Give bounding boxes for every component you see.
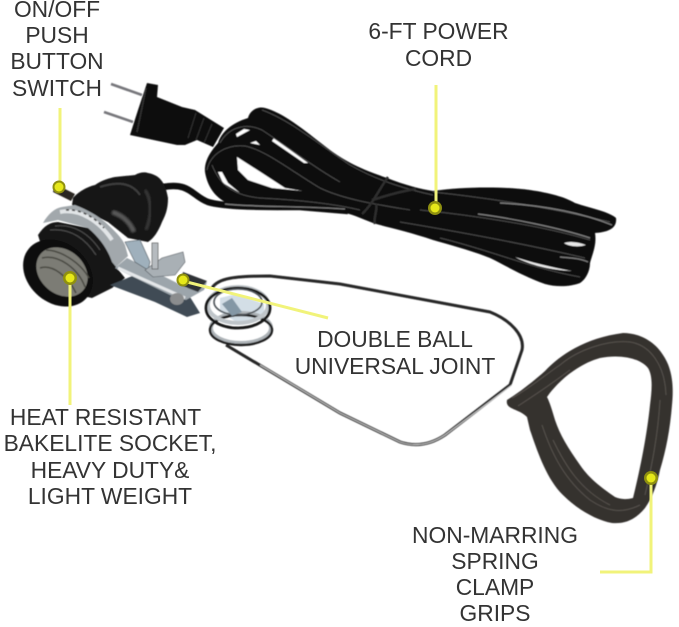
label: power cord: CORD bbox=[405, 45, 472, 71]
push button switch bbox=[53, 184, 75, 201]
power cord bundle bbox=[163, 107, 616, 286]
rubber clamp grip bbox=[507, 333, 673, 523]
cord loop openings bbox=[237, 157, 303, 191]
metal band bbox=[43, 205, 128, 268]
lamp socket bbox=[10, 172, 207, 320]
label: universal joint: DOUBLE BALL bbox=[317, 326, 473, 352]
mounting bracket bbox=[110, 275, 200, 317]
callout: universal joint line bbox=[176, 274, 328, 318]
callout: power cord line bbox=[428, 85, 442, 215]
label: clamp grips: CLAMP bbox=[456, 574, 534, 600]
socket mouth bbox=[10, 226, 106, 320]
label: power cord bbox=[368, 18, 509, 71]
label: bakelite socket: HEAT RESISTANT bbox=[10, 404, 201, 430]
wing nut and screw bbox=[180, 272, 207, 292]
cord tie bbox=[362, 177, 416, 224]
callout: on/off switch line bbox=[52, 108, 66, 194]
power plug bbox=[104, 83, 224, 147]
label: power cord: 6-FT POWER bbox=[368, 18, 509, 44]
label: on/off push button switch: PUSH bbox=[25, 22, 89, 48]
label: clamp grips bbox=[412, 522, 578, 626]
knurled pivot bbox=[170, 293, 184, 305]
label: bakelite socket: LIGHT WEIGHT bbox=[28, 483, 192, 509]
label: clamp grips: SPRING bbox=[451, 548, 539, 574]
label: universal joint: UNIVERSAL JOINT bbox=[295, 353, 495, 379]
label: bakelite socket: BAKELITE SOCKET, bbox=[4, 430, 216, 456]
callout: socket line bbox=[63, 271, 77, 405]
label: clamp grips: GRIPS bbox=[460, 600, 530, 626]
label: on/off push button switch: BUTTON bbox=[10, 48, 104, 74]
label: on/off push button switch bbox=[10, 0, 104, 101]
plug body bbox=[130, 83, 224, 147]
threaded lower body bbox=[38, 222, 125, 298]
wire clamp bbox=[206, 276, 522, 445]
plug prongs bbox=[104, 84, 142, 122]
label: clamp grips: NON-MARRING bbox=[412, 522, 578, 548]
socket body bbox=[72, 172, 168, 242]
label: universal joint bbox=[295, 326, 495, 379]
label: bakelite socket: HEAVY DUTY& bbox=[31, 457, 189, 483]
label: bakelite socket bbox=[4, 404, 216, 509]
callout: grip line bbox=[600, 471, 658, 572]
label: on/off push button switch: SWITCH bbox=[12, 75, 102, 101]
wire spiral bbox=[220, 294, 264, 324]
